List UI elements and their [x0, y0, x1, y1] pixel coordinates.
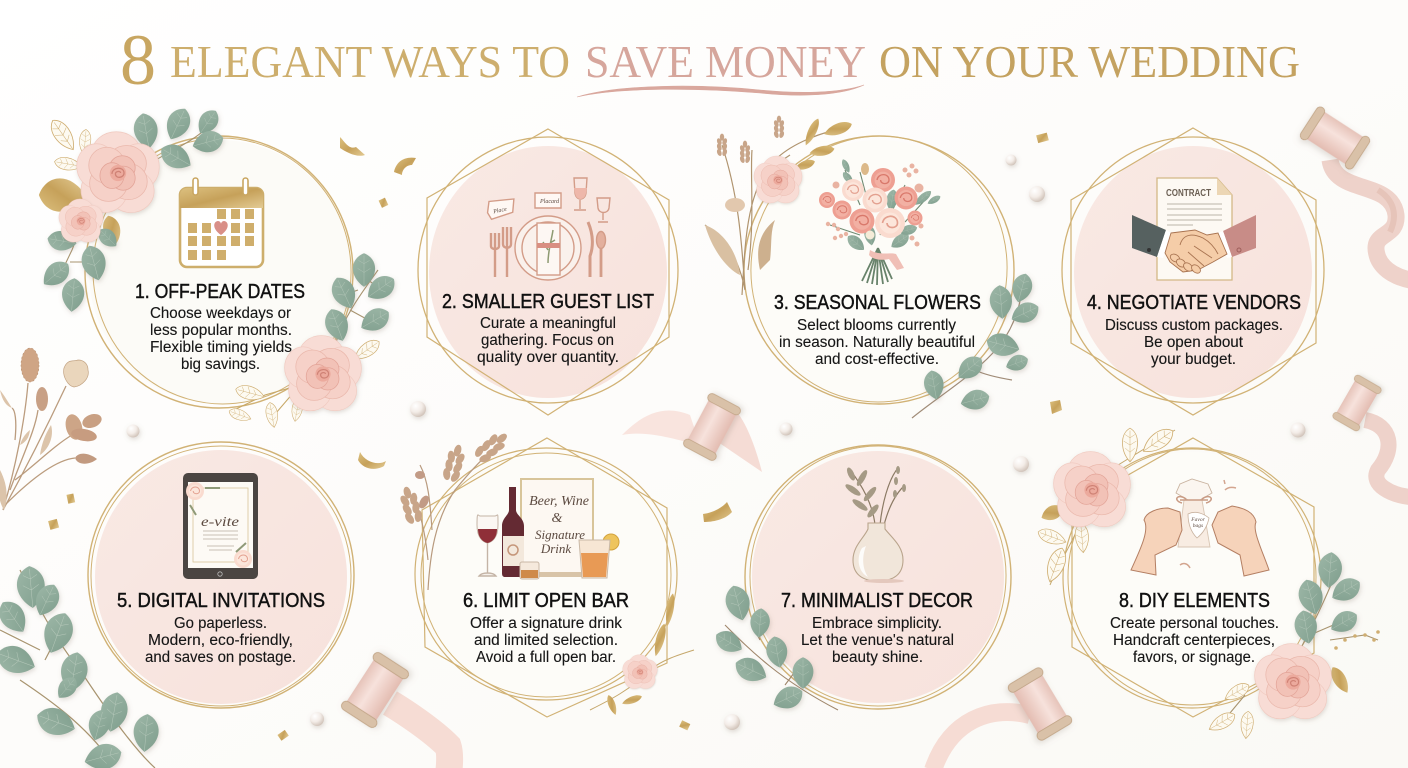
description: off-peak dates: Choose weekdays or [150, 305, 291, 322]
title underline swoosh [577, 85, 864, 97]
sign lettering: Drink [540, 541, 571, 556]
description: digital invitations: and saves on postage. [145, 649, 296, 666]
sign lettering: Beer, Wine [529, 494, 589, 509]
description: off-peak dates: less popular months. [150, 322, 292, 339]
description: limit open bar: and limited selection. [474, 632, 618, 649]
description: smaller guest list: Curate a meaningful [480, 315, 616, 332]
heading: smaller guest list: 2. SMALLER GUEST LIST [442, 291, 654, 313]
heading: minimalist decor: 7. MINIMALIST DECOR [781, 590, 973, 612]
description: digital invitations: Modern, eco-friendly, [148, 632, 293, 649]
heading: negotiate vendors: 4. NEGOTIATE VENDORS [1087, 292, 1301, 314]
heading: limit open bar: 6. LIMIT OPEN BAR [463, 590, 629, 612]
description: limit open bar: Avoid a full open bar. [476, 649, 616, 666]
heading: seasonal flowers: 3. SEASONAL FLOWERS [774, 292, 981, 314]
description: minimalist decor: beauty shine. [832, 649, 923, 666]
panel 5: digital invitations [80, 435, 362, 717]
sign lettering: & [552, 511, 563, 526]
description: negotiate vendors: your budget. [1151, 351, 1236, 368]
floral: panel 8 top-left corner [1036, 424, 1177, 585]
description: seasonal flowers [779, 317, 975, 368]
icon: bouquet [819, 158, 942, 285]
floral: panel 1 top-left corner [37, 104, 226, 313]
description: diy elements: favors, or signage. [1133, 649, 1255, 666]
panel 7: minimalist decor [737, 433, 1019, 719]
description: minimalist decor [801, 615, 954, 666]
description: smaller guest list: gathering. Focus on [481, 332, 614, 349]
ribbon spool: bottom left [340, 651, 450, 768]
heading: digital invitations: 5. DIGITAL INVITATIONS [117, 590, 325, 612]
description: smaller guest list: quality over quantity. [477, 349, 619, 366]
place card labels: Place [492, 207, 508, 216]
place card labels: Placard [539, 199, 560, 205]
description: digital invitations [145, 615, 296, 666]
sign lettering [529, 494, 589, 556]
description: diy elements [1110, 615, 1279, 666]
description: minimalist decor: Embrace simplicity. [812, 615, 942, 632]
icon: tablet e-vite [183, 473, 258, 579]
floral: panel 3 bottom-right corner [912, 271, 1042, 418]
floral: panel 6 bottom-right sprig [590, 593, 694, 716]
favor tag label: bags [1193, 523, 1203, 529]
description: seasonal flowers: in season. Naturally beautiful [779, 334, 975, 351]
pearls [126, 154, 1306, 730]
floral: panel 5 bottom-left eucalyptus [0, 565, 160, 768]
icon: contract and handshake [1132, 178, 1256, 280]
description: negotiate vendors: Be open about [1144, 334, 1244, 351]
title: 8 [120, 20, 156, 100]
ribbon spool: bottom right [933, 666, 1073, 768]
ribbon spool: right middle [1332, 374, 1408, 497]
favor tag label: Favor [1190, 517, 1206, 523]
place card labels [492, 199, 560, 216]
title: SAVE MONEY [585, 36, 866, 87]
panel 8: diy elements [1063, 438, 1321, 717]
description: seasonal flowers: Select blooms currently [797, 317, 956, 334]
gold confetti [48, 133, 1062, 741]
icon: table setting [486, 178, 610, 280]
heading: off-peak dates: 1. OFF-PEAK DATES [135, 281, 305, 303]
icon: contract and handshake: CONTRACT [1166, 188, 1211, 199]
description: minimalist decor: Let the venue's natural [801, 632, 954, 649]
panel 6: limit open bar [415, 438, 677, 717]
description: smaller guest list [477, 315, 619, 366]
icon: calendar [180, 178, 263, 267]
ribbon spool: center [622, 392, 762, 472]
description: off-peak dates: big savings. [181, 356, 260, 373]
ribbon spool: top right [1299, 105, 1408, 280]
icon: tablet e-vite: e-vite [201, 515, 239, 530]
title: ON YOUR WEDDING [879, 36, 1300, 87]
panel 4: negotiate vendors [1062, 128, 1324, 415]
panel 2: smaller guest list [418, 129, 678, 415]
floral: panel 7 left eucalyptus [711, 583, 838, 714]
icon: bar drinks and sign [477, 479, 619, 579]
description: diy elements: Create personal touches. [1110, 615, 1279, 632]
description: off-peak dates [150, 305, 292, 373]
description: negotiate vendors [1105, 317, 1283, 368]
description: limit open bar [470, 615, 622, 666]
dried botanicals: left edge [0, 348, 104, 510]
floral: panel 8 bottom-right corner [1206, 551, 1380, 739]
sign lettering: Signature [535, 527, 585, 542]
icon: vase with branches [844, 466, 906, 583]
title [120, 20, 1300, 100]
heading: diy elements: 8. DIY ELEMENTS [1119, 590, 1270, 612]
panel 3: seasonal flowers [736, 121, 1022, 417]
description: diy elements: Handcraft centerpieces, [1113, 632, 1275, 649]
description: digital invitations: Go paperless. [174, 615, 267, 632]
title: ELEGANT WAYS TO [170, 36, 570, 87]
description: seasonal flowers: and cost-effective. [815, 351, 939, 368]
description: limit open bar: Offer a signature drink [470, 615, 622, 632]
icon: hands tying favor bag [1131, 479, 1269, 576]
floral: panel 1 bottom-right corner [227, 253, 400, 428]
description: off-peak dates: Flexible timing yields [150, 339, 292, 356]
panel 1: off-peak dates [80, 125, 364, 417]
floral: panel 6 dried stems [396, 427, 513, 590]
description: negotiate vendors: Discuss custom packages. [1105, 317, 1283, 334]
favor tag label [1190, 517, 1206, 529]
floral: panel 3 top-left corner [705, 116, 854, 295]
